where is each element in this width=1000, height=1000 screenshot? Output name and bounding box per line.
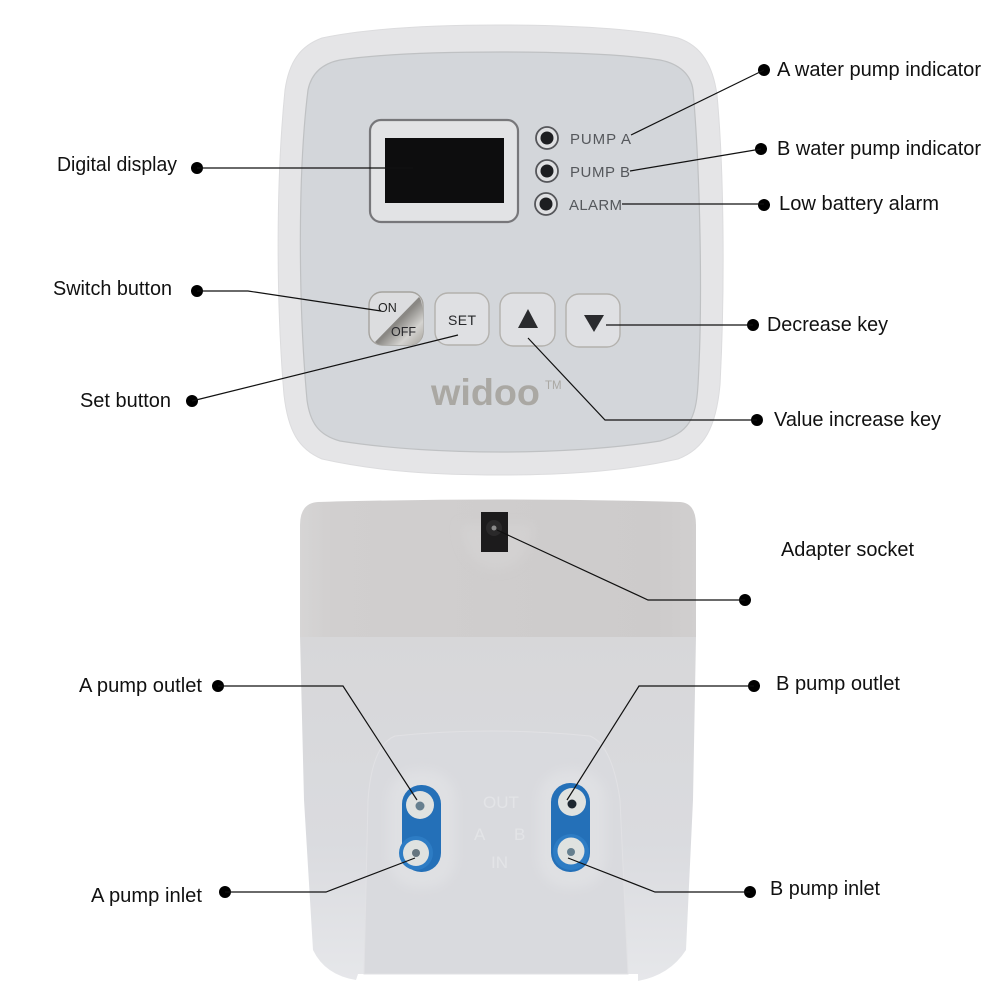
pump B indicator: PUMP B: [570, 164, 630, 181]
callout: decrease key: [606, 314, 888, 336]
callout: digital display: [57, 154, 413, 176]
controller face plate: [300, 52, 700, 452]
controller outer shell: [278, 25, 723, 475]
embossed port labels: [474, 793, 525, 872]
callout: set button: Set button: [80, 390, 171, 412]
adapter socket: [481, 512, 508, 552]
callout: A water pump indicator: A water pump indicator: [777, 59, 981, 81]
callout: B water pump indicator: B water pump indicator: [777, 138, 981, 160]
callout: B water pump indicator: [630, 138, 981, 171]
set button: SET: [448, 312, 476, 328]
panel: controller front view: [278, 25, 723, 475]
B pump connector: [551, 783, 590, 872]
pump B indicator: [536, 160, 630, 182]
pump A indicator: [536, 127, 631, 149]
callout: B pump outlet: B pump outlet: [776, 673, 900, 695]
on/off switch button: ON: [378, 301, 397, 315]
on/off switch button: OFF: [391, 325, 416, 339]
callout: adapter socket: Adapter socket: [781, 539, 914, 561]
callout: set button: [80, 335, 458, 412]
callout: B pump inlet: B pump inlet: [770, 878, 880, 900]
callout: switch button: [53, 278, 381, 311]
pump panel recess: [364, 731, 628, 974]
brand logo: widoo: [430, 372, 540, 413]
callout: switch button: Switch button: [53, 278, 172, 300]
panel: pump unit view: [300, 500, 696, 981]
lower body: [300, 636, 696, 981]
upper body: [300, 500, 696, 637]
connector halo: [388, 770, 606, 888]
callout: A pump inlet: [91, 858, 415, 907]
up arrow button: [500, 293, 555, 346]
down arrow button: [566, 294, 620, 347]
embossed port labels: B: [514, 825, 525, 844]
alarm indicator: [535, 193, 622, 215]
callout: low battery alarm: [622, 193, 939, 215]
alarm indicator: ALARM: [569, 197, 622, 214]
callout: value increase key: Value increase key: [774, 409, 941, 431]
A pump connector: [399, 785, 441, 872]
callout: digital display: Digital display: [57, 154, 177, 176]
embossed port labels: OUT: [483, 793, 519, 812]
callout: adapter socket: [497, 530, 914, 606]
callout: decrease key: Decrease key: [767, 314, 888, 336]
callout: A pump outlet: A pump outlet: [79, 675, 202, 697]
callout: B pump outlet: [567, 673, 900, 800]
callout: A pump outlet: [79, 675, 417, 800]
pump A indicator: PUMP A: [570, 131, 631, 148]
brand logo: TM: [545, 380, 562, 392]
digital display: [370, 120, 518, 222]
embossed port labels: A: [474, 825, 486, 844]
on/off switch button: [369, 292, 423, 345]
callout: A water pump indicator: [631, 59, 981, 135]
callout: value increase key: [528, 338, 941, 431]
callout: B pump inlet: [568, 858, 880, 900]
callout: low battery alarm: Low battery alarm: [779, 193, 939, 215]
set button: [435, 293, 489, 345]
embossed port labels: IN: [491, 853, 508, 872]
callout: A pump inlet: A pump inlet: [91, 885, 202, 907]
socket recess: [461, 525, 532, 569]
